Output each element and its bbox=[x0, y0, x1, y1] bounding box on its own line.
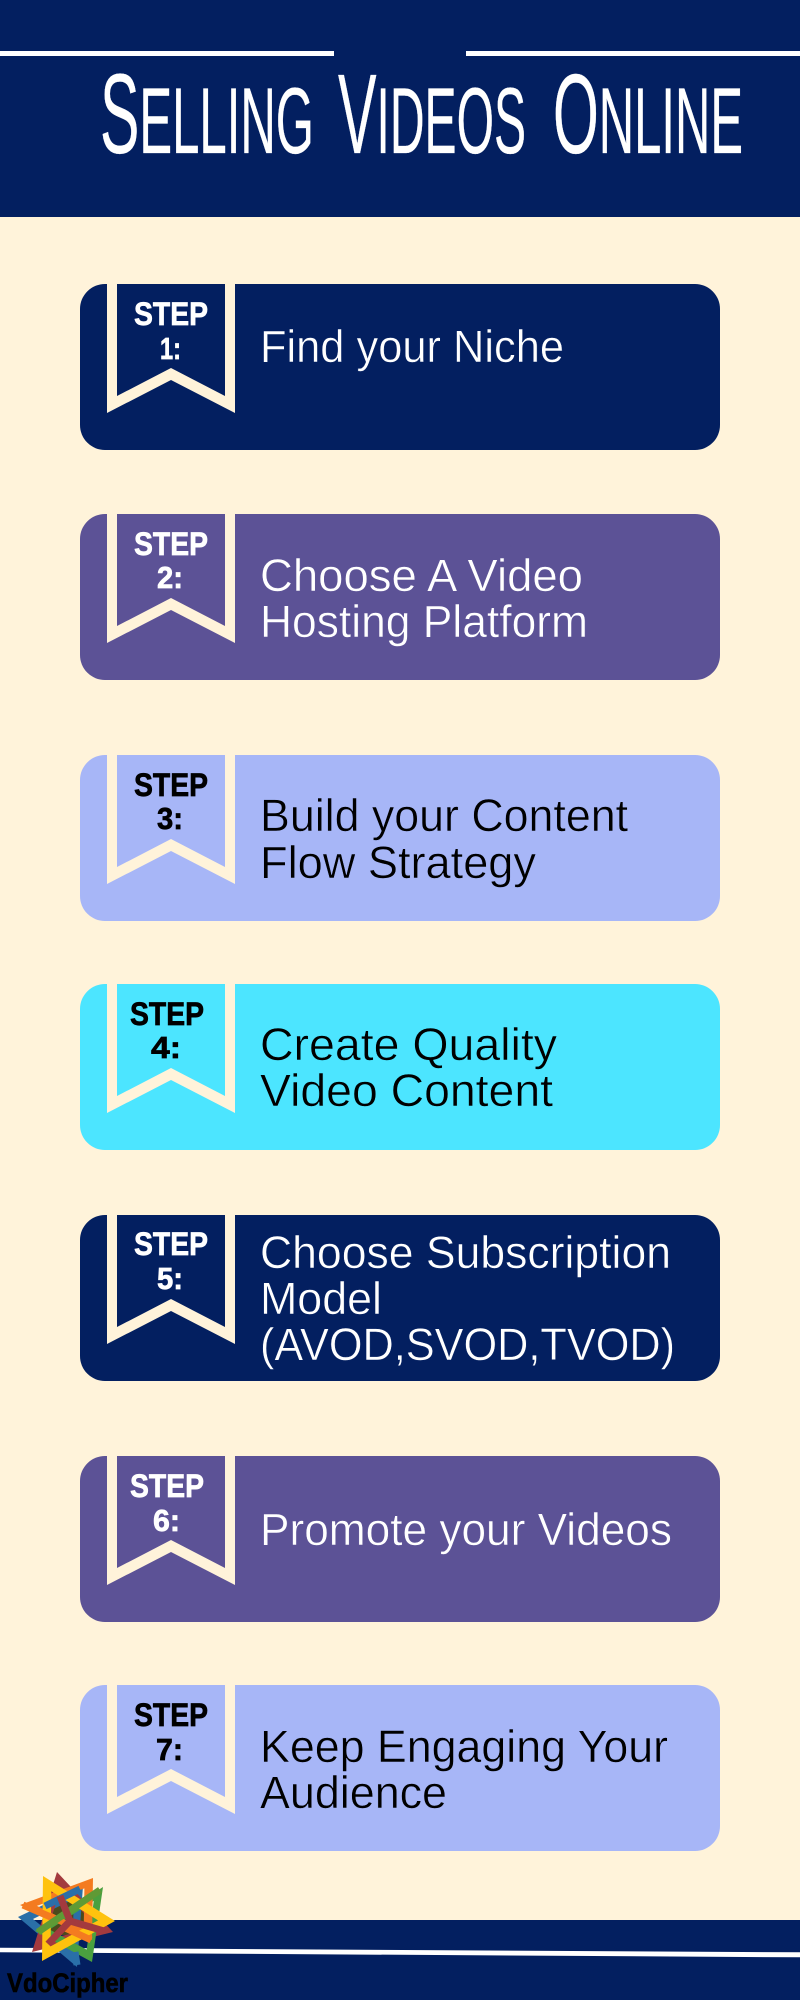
ribbon: step 5 bbox=[107, 1215, 235, 1344]
label: step 3: STEP bbox=[134, 767, 208, 803]
text: step 2: Choose A Video bbox=[260, 550, 583, 601]
label: step 7: STEP bbox=[134, 1697, 208, 1733]
label: step 7: 7: bbox=[156, 1732, 183, 1767]
label: step 4 bbox=[130, 996, 204, 1065]
title: VIDEOS bbox=[338, 51, 526, 177]
ribbon: step 6 bbox=[107, 1456, 235, 1585]
icon: VdoCipher logo bbox=[18, 1872, 115, 1967]
label: step 5 bbox=[134, 1226, 208, 1296]
panel: step 1 bbox=[80, 284, 720, 450]
text: step 2: Hosting Platform bbox=[260, 596, 588, 647]
text: step 5: Choose Subscription bbox=[260, 1227, 671, 1278]
label: step 3 bbox=[134, 767, 208, 836]
panel: step 2 bbox=[80, 514, 720, 680]
text: step 1: Find your Niche bbox=[260, 321, 564, 372]
label: step 2: STEP bbox=[134, 526, 208, 562]
panel: step 7 bbox=[80, 1685, 720, 1851]
title: SELLING bbox=[100, 51, 314, 177]
panel: step 3 bbox=[80, 755, 720, 921]
panel: step 6 bbox=[80, 1456, 720, 1622]
ribbon: step 2 bbox=[107, 514, 235, 643]
panel: step 4 bbox=[80, 984, 720, 1150]
title bbox=[100, 51, 743, 177]
text: step 4 bbox=[260, 1019, 558, 1116]
label: step 4: STEP bbox=[130, 996, 204, 1032]
ribbon: step 7 bbox=[107, 1685, 235, 1814]
label: step 2: 2: bbox=[157, 560, 183, 595]
text: step 7 bbox=[260, 1721, 668, 1818]
label: step 3: 3: bbox=[157, 801, 183, 836]
label: step 2 bbox=[134, 526, 208, 595]
label: step 4: 4: bbox=[151, 1030, 181, 1065]
label: step 6 bbox=[130, 1468, 204, 1538]
text: step 3: Build your Content bbox=[260, 790, 628, 841]
text: step 5: Model bbox=[260, 1273, 382, 1324]
header band bbox=[0, 0, 800, 217]
text: step 4: Video Content bbox=[260, 1065, 553, 1116]
label: step 6: 6: bbox=[153, 1503, 180, 1538]
label: step 5: 5: bbox=[157, 1261, 183, 1296]
label: step 6: STEP bbox=[130, 1468, 204, 1504]
label: step 7 bbox=[134, 1697, 208, 1767]
text: step 7: Audience bbox=[260, 1767, 447, 1818]
text: step 5 bbox=[260, 1227, 675, 1370]
panel: step 5 bbox=[80, 1215, 720, 1381]
text: step 3 bbox=[260, 790, 628, 888]
text: step 7: Keep Engaging Your bbox=[260, 1721, 668, 1772]
label: step 1: 1: bbox=[160, 331, 181, 366]
ribbon: step 1 bbox=[107, 284, 235, 413]
text: step 3: Flow Strategy bbox=[260, 837, 536, 888]
ribbon: step 4 bbox=[107, 984, 235, 1113]
ribbon: step 3 bbox=[107, 755, 235, 884]
text: step 2 bbox=[260, 550, 588, 647]
footer band bbox=[0, 1920, 800, 2000]
label: step 1: STEP bbox=[134, 296, 208, 332]
logo wordmark: VdoCipher bbox=[7, 1968, 128, 1998]
label: step 5: STEP bbox=[134, 1226, 208, 1262]
label: step 1 bbox=[134, 296, 208, 366]
text: step 4: Create Quality bbox=[260, 1019, 558, 1070]
text: step 6: Promote your Videos bbox=[260, 1504, 672, 1555]
text: step 5: (AVOD,SVOD,TVOD) bbox=[260, 1319, 675, 1370]
